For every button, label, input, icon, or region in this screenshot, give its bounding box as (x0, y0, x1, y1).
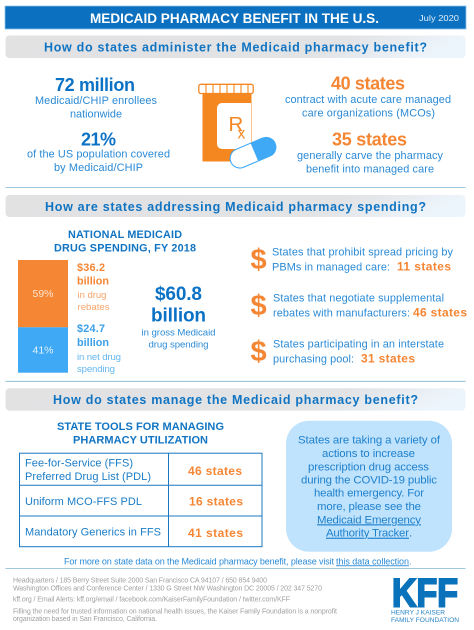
stat: 35 states (297, 130, 444, 176)
stat: 21 percent: by Medicaid/CHIP (54, 162, 143, 174)
section heading: manage (6, 388, 466, 411)
data collection note: . (409, 556, 412, 566)
stat: 35 states: benefit into managed care (306, 164, 434, 176)
stat: 21 percent: of the US population covered (27, 148, 170, 160)
label: net drug spending: $24.7 (77, 323, 105, 335)
section heading: manage: How do states manage the Medicaid pharmacy benefit? (53, 393, 418, 407)
policy: spread pricing: 11 states (397, 260, 451, 274)
table heading (57, 421, 224, 447)
footer: contact details: Headquarters / 185 Berry Street Suite 2000 San Francisco CA 94107 / 650 854 9400 (13, 578, 267, 585)
data collection note: this data collection (336, 556, 409, 566)
policy: supplemental rebates: States that negotiate supplemental (273, 293, 444, 305)
label: drug rebates: in drug (78, 290, 106, 301)
chart heading (54, 229, 196, 255)
stat: 40 states (285, 74, 451, 120)
title: MEDICAID PHARMACY BENEFIT IN THE U.S. (90, 11, 379, 26)
stat: 40 states: 40 states (331, 74, 405, 94)
footer: contact details: organization based in San Francisco, California. (13, 616, 157, 623)
callout: COVID-19 actions: Authority Tracker (326, 528, 409, 540)
policy: supplemental rebates (250, 290, 467, 322)
icon: pill bottle and capsule: x (238, 126, 246, 142)
table: state tools (20, 453, 262, 547)
stat: 72 million enrollees: nationwide (70, 108, 122, 120)
label: drug rebates (77, 262, 110, 313)
KFF logo: HENRY J KAISER (391, 610, 445, 617)
label: drug rebates: $36.2 (77, 262, 105, 274)
stacked bar chart: 41% (32, 345, 54, 357)
policy: purchasing pool: purchasing pool: (273, 354, 354, 366)
KFF logo: KFF (392, 572, 458, 616)
policy: supplemental rebates: 46 states (413, 306, 467, 320)
chart heading: NATIONAL MEDICAID (68, 229, 182, 241)
total: 60.8 billion: drug spending (148, 340, 208, 350)
table: state tools: 16 states (189, 495, 243, 509)
title banner (5, 6, 466, 29)
data collection note: For more on state data on the Medicaid pharmacy benefit, please visit (64, 556, 334, 566)
stat: 40 states: care organizations (MCOs) (302, 108, 435, 120)
label: net drug spending: billion (77, 337, 109, 349)
icon: pill bottle and capsule: R (228, 113, 243, 136)
section heading: spending (6, 195, 466, 217)
stat: 35 states: generally carve the pharmacy (297, 150, 444, 162)
total: 60.8 billion: billion (151, 306, 206, 327)
stat: 35 states: 35 states (332, 130, 407, 150)
callout: COVID-19 actions: actions to increase (322, 448, 415, 460)
table heading: STATE TOOLS FOR MANAGING (57, 421, 224, 433)
label: drug rebates: billion (77, 276, 109, 288)
stat: 72 million enrollees (35, 75, 158, 120)
footer: contact details: kff.org / Email Alerts: kff.org/email / facebook.com/KaiserFamilyFoundation / twitter.com/KFF (13, 597, 290, 604)
stat: 72 million enrollees: Medicaid/CHIP enrollees (35, 95, 158, 107)
chart heading: DRUG SPENDING, FY 2018 (54, 243, 196, 255)
table: state tools: Fee-for-Service (FFS) (25, 458, 133, 470)
label: net drug spending (77, 323, 121, 375)
table: state tools: 46 states (188, 464, 242, 478)
label: drug rebates: rebates (78, 302, 110, 313)
footer: contact details: Filling the need for trusted information on national health issues, the Kaiser Family Foundation is a nonprofit (13, 608, 337, 615)
stacked bar chart: 59% (32, 288, 54, 300)
policy: supplemental rebates: rebates with manufacturers: (273, 308, 410, 320)
callout: COVID-19 actions: Medicaid Emergency (317, 514, 421, 526)
label: net drug spending: spending (77, 364, 115, 375)
stacked bar chart (18, 260, 68, 373)
KFF logo: FAMILY FOUNDATION (391, 617, 459, 624)
footer: contact details (13, 578, 337, 623)
callout: COVID-19 actions: States are taking a variety of (298, 434, 441, 446)
icon: pill bottle and capsule (199, 84, 279, 171)
callout: COVID-19 actions: prescription drug access (308, 461, 429, 473)
table: state tools: Preferred Drug List (PDL) (25, 471, 151, 483)
policy: spread pricing (250, 244, 454, 276)
table: state tools: 41 states (188, 526, 243, 540)
section heading: administer: How do states administer the Medicaid pharmacy benefit? (44, 40, 427, 54)
stat: 40 states: contract with acute care managed (285, 94, 451, 106)
table heading: PHARMACY UTILIZATION (73, 435, 208, 447)
policy: purchasing pool: 31 states (361, 352, 415, 366)
callout: COVID-19 actions: health emergency. For (314, 488, 424, 500)
total: 60.8 billion: $60.8 (155, 284, 202, 305)
section heading: spending: How are states addressing Medicaid pharmacy spending? (45, 200, 426, 214)
total: 60.8 billion: in gross Medicaid (142, 328, 216, 339)
policy: spread pricing: PBMs in managed care: (272, 262, 390, 274)
table: state tools: Mandatory Generics in FFS (25, 527, 161, 539)
footer: contact details: Washington Offices and Conference Center / 1330 G Street NW Washington DC 20005 / 202 347 5270 (13, 586, 322, 592)
policy: purchasing pool (250, 336, 444, 368)
stat: 72 million enrollees: 72 million (55, 75, 135, 95)
policy: spread pricing: States that prohibit spread pricing by (272, 246, 454, 258)
total: 60.8 billion (142, 284, 216, 350)
section heading: administer (6, 36, 466, 58)
icon: dollar sign: $ (250, 336, 267, 368)
icon: dollar sign: $ (250, 244, 267, 276)
callout: COVID-19 actions: during the COVID-19 public (301, 474, 437, 486)
callout: COVID-19 actions: more, please see the (317, 501, 421, 513)
callout: COVID-19 actions: . (409, 528, 412, 540)
icon: dollar sign: $ (250, 290, 267, 322)
callout: COVID-19 actions (286, 421, 452, 552)
stat: 21 percent (27, 130, 170, 174)
policy: purchasing pool: States participating in an interstate (273, 339, 444, 351)
label: net drug spending: in net drug (77, 352, 121, 363)
stat: 21 percent: 21% (81, 130, 116, 150)
date: July 2020 (419, 13, 459, 23)
table: state tools: Uniform MCO-FFS PDL (25, 496, 142, 508)
